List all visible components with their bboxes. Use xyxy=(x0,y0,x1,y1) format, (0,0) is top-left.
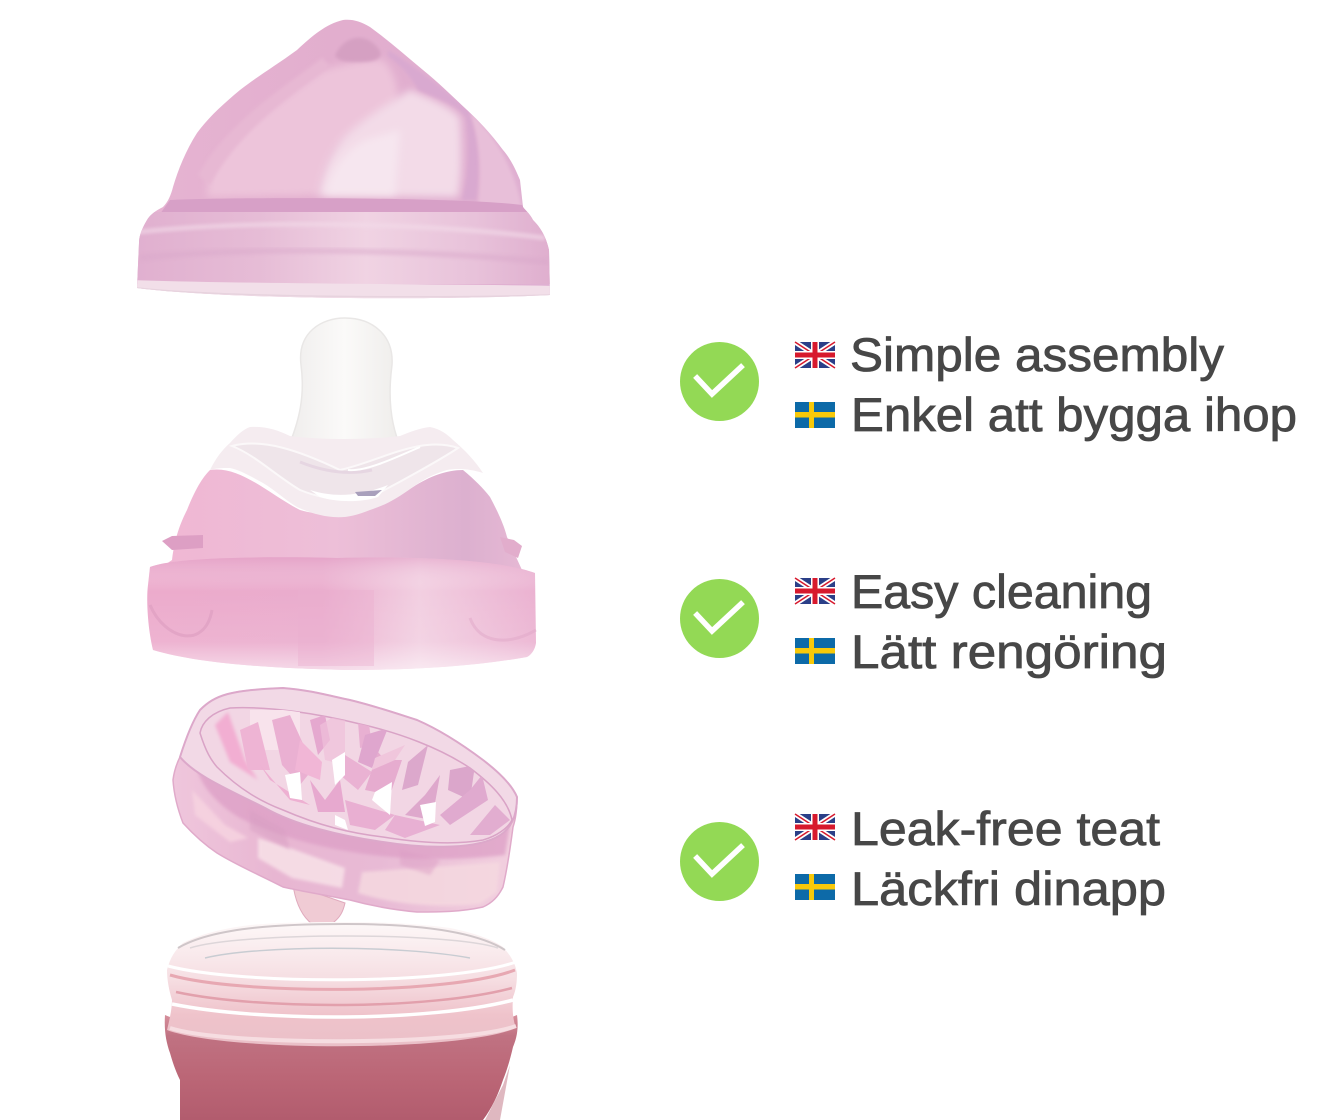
swirl panel bright xyxy=(318,90,461,197)
photo: bottle xyxy=(165,922,518,1120)
collar band xyxy=(147,557,536,670)
icon: Swedish flag xyxy=(795,874,835,900)
bottle body xyxy=(165,1015,518,1120)
icon: green check xyxy=(680,342,759,421)
feature: simple assembly xyxy=(680,328,1297,441)
text: Lätt rengöring: Lätt rengöring xyxy=(851,625,1167,678)
dark wall band xyxy=(195,750,510,859)
valve tab xyxy=(293,885,345,927)
collar dome xyxy=(150,469,522,575)
swirl panel left xyxy=(207,60,398,197)
left streak xyxy=(213,61,324,174)
swirl tip xyxy=(335,38,381,62)
text: Leak-free teat: Leak-free teat xyxy=(851,802,1160,855)
icon: UK flag xyxy=(795,342,835,368)
valve rim xyxy=(180,688,517,847)
valve interior xyxy=(200,708,512,843)
clear flange xyxy=(210,427,483,517)
icon: green check xyxy=(680,579,759,658)
pale wall patches xyxy=(192,790,248,842)
photo: teat and collar xyxy=(147,318,536,670)
icon: UK flag xyxy=(795,814,835,840)
icon: silicone teat xyxy=(287,318,402,450)
icon: Swedish flag xyxy=(795,638,835,664)
icon: UK flag xyxy=(795,578,835,604)
groove xyxy=(160,198,530,214)
swirl ridge xyxy=(394,57,470,113)
right lobe xyxy=(472,116,521,204)
icon: green check xyxy=(680,822,759,901)
feature: leak-free teat xyxy=(680,802,1166,915)
text: Easy cleaning: Easy cleaning xyxy=(851,565,1152,618)
bottle neck xyxy=(167,922,517,1046)
icon: Swedish flag xyxy=(795,402,835,428)
photo: valve insert xyxy=(173,688,517,927)
text: Simple assembly: Simple assembly xyxy=(850,328,1225,381)
valve side wall xyxy=(173,688,517,912)
photo: outer cap xyxy=(130,20,560,310)
text: Enkel att bygga ihop: Enkel att bygga ihop xyxy=(851,388,1297,441)
text: Läckfri dinapp: Läckfri dinapp xyxy=(851,862,1166,915)
feature: easy cleaning xyxy=(680,565,1167,678)
